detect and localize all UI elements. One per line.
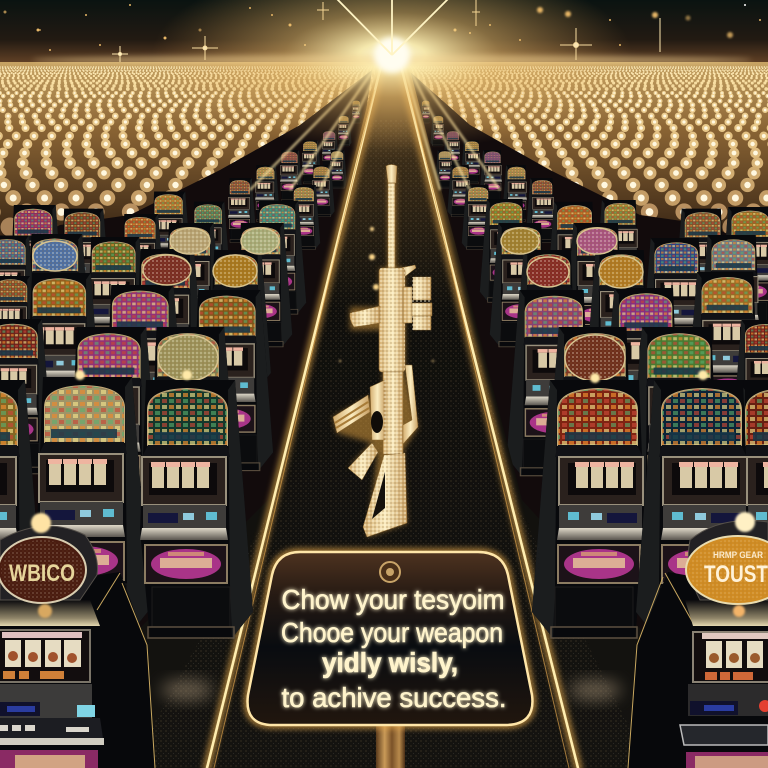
stock	[363, 453, 407, 537]
right bank of mid-distance slot machines	[420, 100, 768, 528]
oval sign texture	[502, 229, 642, 380]
stock cutout	[372, 472, 385, 519]
sign text: Chow your tesyoim	[282, 584, 504, 615]
sign post	[376, 722, 405, 768]
message sign	[248, 552, 532, 725]
glowing aisle lines	[207, 66, 578, 768]
sign text: to achive success.	[282, 682, 506, 713]
oval sign texture	[34, 229, 278, 380]
reels	[0, 630, 90, 682]
golden jewelled rifle	[333, 164, 432, 537]
topper bulbs	[75, 370, 192, 380]
near right slot machines	[532, 370, 768, 638]
topper bulbs	[31, 513, 52, 618]
topper sign: TOUST: HRMP GEAR	[713, 550, 763, 560]
field of distant jewelled machines	[0, 62, 768, 252]
sparkles	[112, 0, 660, 62]
converging light rays along machine rows	[250, 66, 500, 190]
sign screw	[380, 562, 400, 582]
control panel	[680, 684, 768, 745]
sign text: yidly wisly,	[322, 647, 458, 678]
floor sparkles around rifle	[339, 227, 434, 362]
front left slot machine	[0, 513, 155, 768]
scope	[403, 277, 432, 330]
sign text: Chooe your weapon	[281, 617, 503, 648]
trigger guard arm	[403, 365, 418, 444]
rifle glow	[333, 170, 418, 537]
near left slot machines	[0, 370, 253, 638]
foregrip	[350, 306, 380, 327]
reels	[693, 632, 768, 682]
floor light reflections	[161, 680, 621, 700]
topper bulbs	[733, 512, 755, 617]
topper sign: WBICO	[0, 537, 86, 603]
topper sign: WBICO: WBICO	[9, 560, 75, 587]
ejection port	[371, 411, 383, 433]
handguard	[379, 268, 405, 372]
starburst on horizon	[32, 0, 752, 150]
receiver	[383, 372, 403, 454]
pistol grip	[348, 443, 378, 480]
lower screen	[0, 750, 98, 768]
sight	[400, 265, 416, 278]
barrel and muzzle	[386, 164, 397, 268]
stars	[4, 4, 761, 51]
front right slot machine	[628, 512, 768, 768]
sky background	[0, 0, 768, 66]
dome highlights	[0, 93, 768, 212]
topper sign: TOUST	[686, 536, 768, 604]
magazine	[333, 395, 370, 433]
diamond texture	[348, 183, 432, 537]
floor glitter texture	[130, 120, 650, 768]
control panel	[0, 684, 104, 745]
left bank of mid-distance slot machines	[0, 100, 362, 528]
lower screen	[686, 752, 768, 768]
sign text	[281, 584, 506, 713]
magazine stripes	[335, 402, 369, 428]
topper bulbs	[590, 370, 708, 383]
